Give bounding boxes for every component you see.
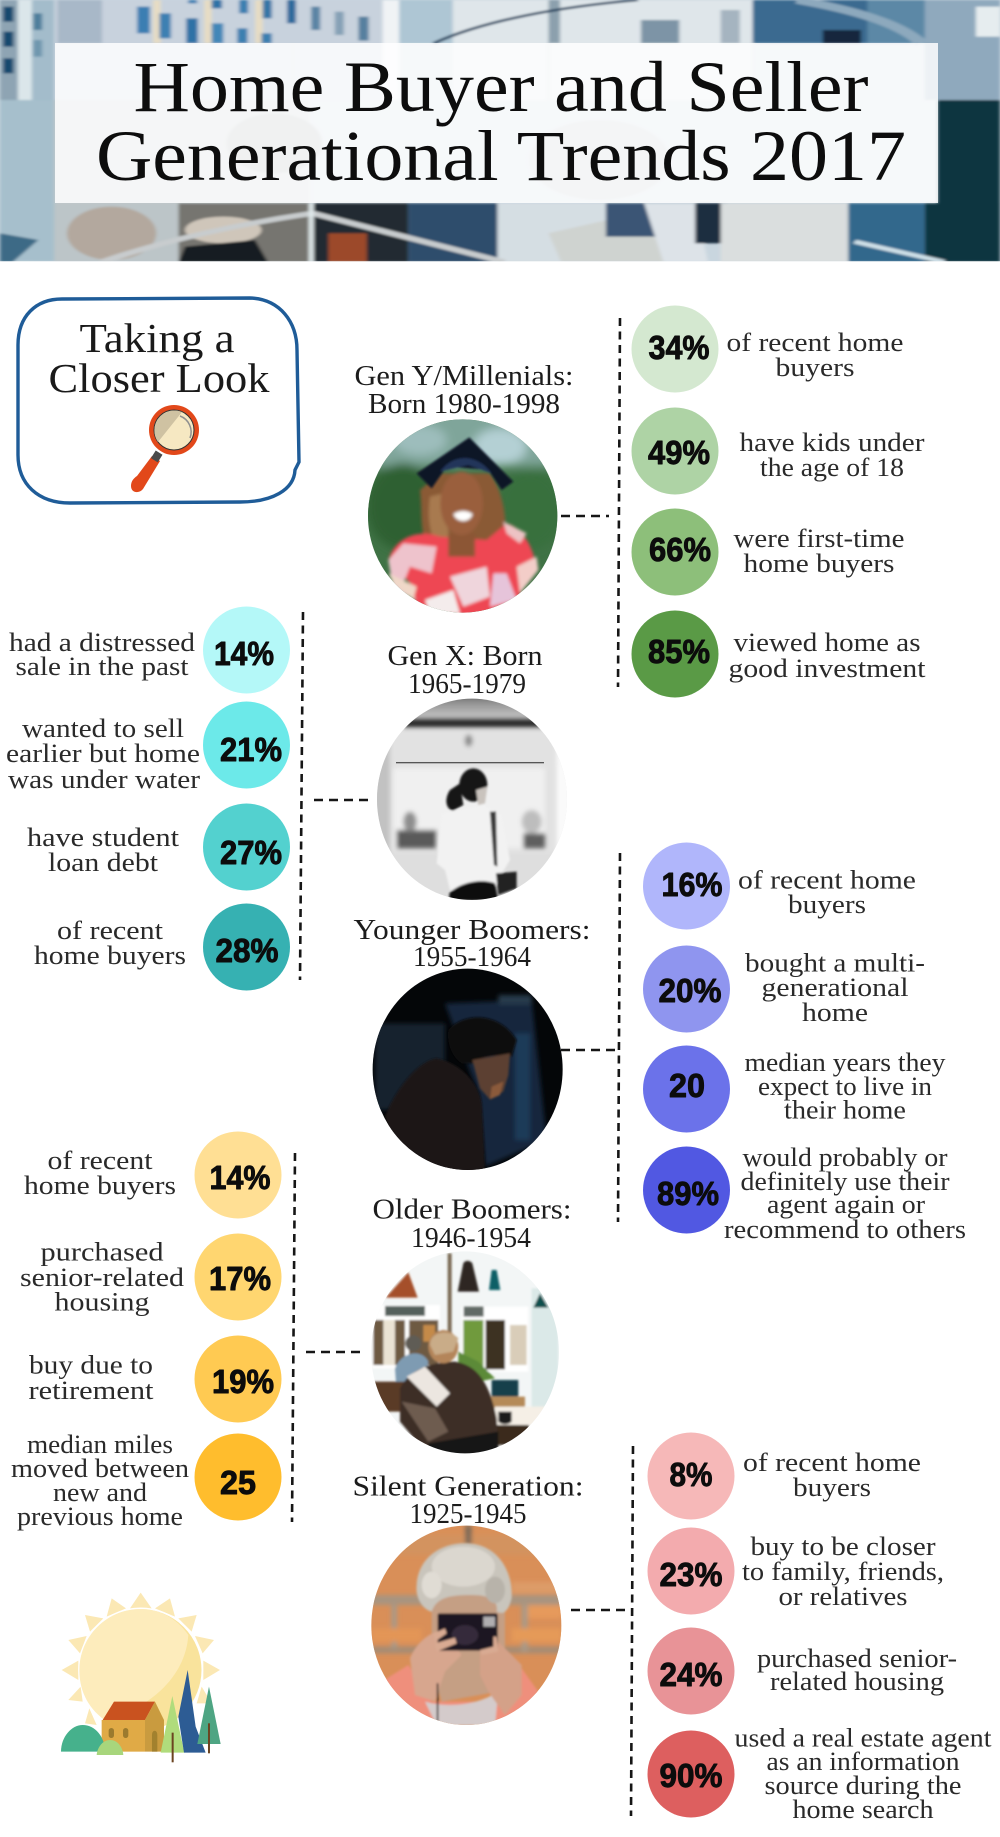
stat: 14% [194,1132,282,1218]
label: median years: their home [784,1096,906,1124]
label: median miles [11,1430,189,1531]
label: student loan: loan debt [48,848,159,877]
label: recent buyers [738,866,916,919]
label: closer to family: or relatives [778,1582,908,1611]
label: multi-generational: generational [762,973,908,1002]
label: of recent home buyers: buyers [776,353,854,382]
label: good investment: good investment [728,654,926,683]
label: use agent again: would probably or [742,1143,948,1172]
label: agent source: used a real estate agent [734,1724,992,1752]
stat: 19%: 19% [212,1363,274,1400]
stat: 66% [632,508,718,596]
stat: 20: 20 [669,1067,705,1104]
connector: younger boomers dashes [561,1049,615,1051]
stat: 90% [648,1730,734,1818]
panel: gen y millenials [354,306,926,698]
label: of recent home buyers: of recent home [726,328,904,357]
stat: 89% [643,1146,730,1234]
stat: 20% [643,946,730,1032]
stat: 8% [648,1432,734,1520]
label: use agent again: recommend to others [724,1215,966,1244]
label: median years [744,1048,946,1124]
label: student loan: have student [27,823,180,852]
heading: younger boomers: Younger Boomers: [354,915,590,946]
heading: gen x: Gen X: Born [388,641,542,672]
label: median miles: moved between [11,1454,189,1483]
label: retirement [28,1350,154,1405]
panel: taking a closer look: Taking a [80,315,234,361]
connector: silent generation stat line [631,1446,633,1816]
heading: gen y: Gen Y/Millenials: [354,361,574,392]
stat: 34% [632,306,718,392]
label: student loan [27,823,180,877]
panel: younger boomers [354,842,966,1244]
photo: man in dark [372,968,563,1170]
label: median miles: previous home [17,1502,183,1531]
label: retirement: buy due to [29,1350,153,1380]
stat: 66%: 66% [649,531,711,568]
stat: 20 [643,1046,730,1132]
stat: 14%: 14% [210,1159,270,1196]
stat: 89%: 89% [657,1175,719,1212]
label: multi-generational: bought a multi- [745,948,925,978]
heading: silent generation: Silent Generation: [352,1472,584,1502]
label: agent source [734,1724,992,1824]
heading: silent generation: 1925-1945 [410,1499,526,1530]
stat: 28%: 28% [216,932,278,969]
heading: gen x: 1965-1979 [408,669,526,700]
label: retirement: retirement [28,1376,154,1405]
label: senior-related: purchased senior- [757,1644,957,1673]
label: under water: wanted to sell [22,714,184,743]
stat: 14%: 14% [214,635,274,672]
label: median miles: new and [53,1478,147,1507]
label: recent buyers [34,916,186,970]
label: recent buyers: buyers [788,890,866,919]
panel: taking a closer look [18,298,299,503]
stat: 85%: 85% [648,633,710,670]
connector: older boomers dashes [306,1351,364,1353]
label: of recent home buyers [726,328,904,382]
stat: 19% [194,1336,282,1422]
stat: 49% [632,408,718,494]
label: agent source: as an information [766,1747,960,1776]
label: recent buyers: of recent home [743,1448,921,1477]
label: distressed sale: had a distressed [9,628,195,657]
connector: gen x stat line [300,612,303,980]
label: multi-generational [745,948,925,1027]
label: median years: median years they [744,1048,946,1077]
photo: man in cafe [371,1252,559,1454]
stat: 23% [648,1528,734,1614]
label: distressed sale: sale in the past [16,652,189,681]
label: recent buyers: of recent [48,1146,153,1175]
label: recent buyers: of recent home [738,866,916,894]
panel: older boomers [11,1132,576,1531]
stat: 25: 25 [220,1464,256,1501]
header banner photo [0,0,1000,262]
label: multi-generational: home [802,998,868,1027]
stat: 17% [194,1234,282,1320]
stat: 34%: 34% [648,329,710,366]
stat: 28% [203,904,290,990]
label: median miles: median miles [27,1430,173,1459]
label: good investment: viewed home as [734,628,920,657]
title box [55,43,938,203]
connector: gen y dashes [561,515,609,517]
label: have kids: have kids under [740,428,925,457]
stat: 85% [632,610,718,698]
connector: gen y stat line [618,318,620,687]
label: senior-related: housing [54,1288,150,1316]
photo: woman at train [377,698,567,900]
panel: silent generation [352,1432,992,1824]
label: first-time: home buyers [744,549,894,578]
stat: 20%: 20% [658,972,722,1009]
stat: 27% [203,804,290,890]
stat: 90%: 90% [660,1757,722,1794]
label: recent buyers: buyers [793,1473,871,1502]
stat: 16%: 16% [662,866,722,903]
label: closer to family: to family, friends, [742,1557,944,1586]
label: recent buyers: of recent [57,916,164,945]
stat: 8%: 8% [670,1456,712,1493]
heading: silent generation [352,1472,584,1530]
heading: older boomers: 1946-1954 [411,1223,531,1254]
label: good investment [728,628,926,683]
label: distressed sale [9,628,195,681]
label: closer to family [742,1532,944,1611]
stat: 17%: 17% [209,1260,271,1297]
stat: 21% [203,702,290,788]
panel: gen x [6,606,581,990]
label: have kids: the age of 18 [760,453,904,482]
label: first-time: were first-time [734,524,904,553]
label: under water: was under water [8,765,200,794]
label: use agent again: definitely use their [740,1167,950,1196]
label: recent buyers: home buyers [24,1171,176,1200]
label: senior-related [757,1644,957,1696]
label: recent buyers: home buyers [34,941,186,970]
label: first-time [734,524,904,578]
icon: sun and house illustration [61,1593,221,1762]
stat: 27%: 27% [220,834,282,871]
icon: magnifying glass [131,405,199,492]
label: recent buyers [743,1448,921,1502]
label: recent buyers [24,1146,176,1200]
photo: woman with camera [371,1526,562,1725]
stat: 49%: 49% [648,434,710,471]
heading: younger boomers [354,915,590,973]
label: median years: expect to live in [758,1072,932,1101]
label: use agent again: agent again or [767,1190,925,1219]
label: senior-related: senior-related [20,1263,184,1292]
label: agent source: home search [792,1795,934,1824]
label: closer to family: buy to be closer [750,1532,936,1561]
label: senior-related: related housing [770,1667,944,1696]
stat: 24% [648,1628,734,1714]
photo: graduate [368,419,558,613]
connector: younger boomers stat line [618,853,620,1222]
label: use agent again [724,1143,966,1244]
label: under water [6,714,200,794]
label: senior-related [20,1238,184,1316]
heading: gen y [354,361,574,420]
heading: older boomers: Older Boomers: [372,1194,572,1226]
heading: younger boomers: 1955-1964 [413,942,531,973]
label: agent source: source during the [764,1771,962,1800]
title box: Generational Trends 2017 [96,116,906,196]
heading: gen y: Born 1980-1998 [368,389,560,420]
stat: 24%: 24% [660,1656,722,1693]
stat: 21%: 21% [220,731,282,768]
connector: silent generation dashes [571,1609,628,1611]
heading: gen x [388,641,542,700]
label: under water: earlier but home [6,739,200,768]
connector: gen x dashes [314,799,371,801]
heading: older boomers [372,1194,572,1254]
stat: 23%: 23% [660,1556,722,1593]
stat: 25 [194,1434,282,1520]
label: senior-related: purchased [40,1238,164,1266]
stat: 14% [203,606,290,694]
title box: Home Buyer and Seller [134,47,869,127]
panel: taking a closer look: Closer Look [48,355,270,401]
label: have kids [740,428,925,482]
connector: older boomers stat line [292,1153,295,1522]
stat: 16% [643,842,730,930]
